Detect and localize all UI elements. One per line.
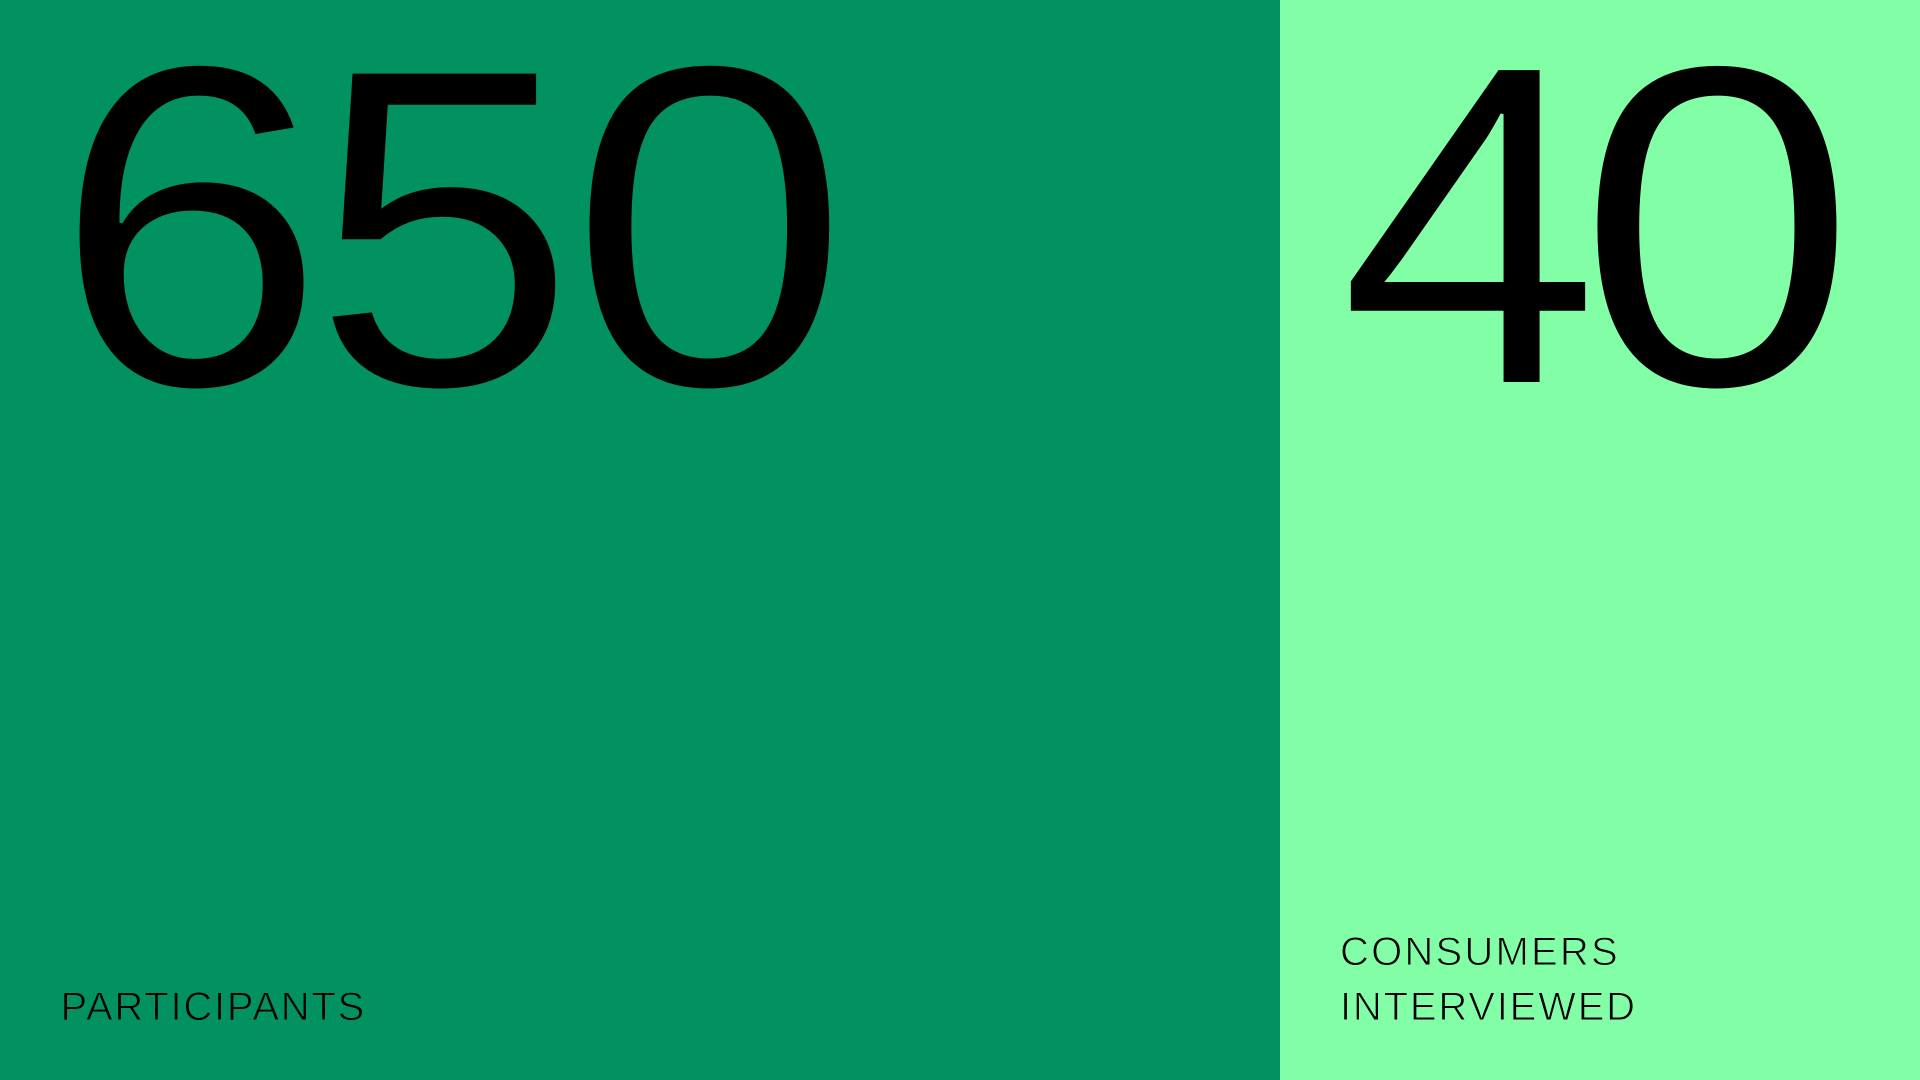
- label: participants: PARTICIPANTS: [60, 985, 366, 1029]
- label: consumers interviewed: CONSUMERS: [1340, 930, 1620, 974]
- label: consumers interviewed: INTERVIEWED: [1340, 985, 1637, 1029]
- number: 650: [53, 0, 851, 483]
- panel: participants: [0, 0, 1280, 1080]
- panel: consumers interviewed: [1280, 0, 1920, 1080]
- label: consumers interviewed: [1340, 930, 1637, 1029]
- number: 40: [1338, 0, 1858, 483]
